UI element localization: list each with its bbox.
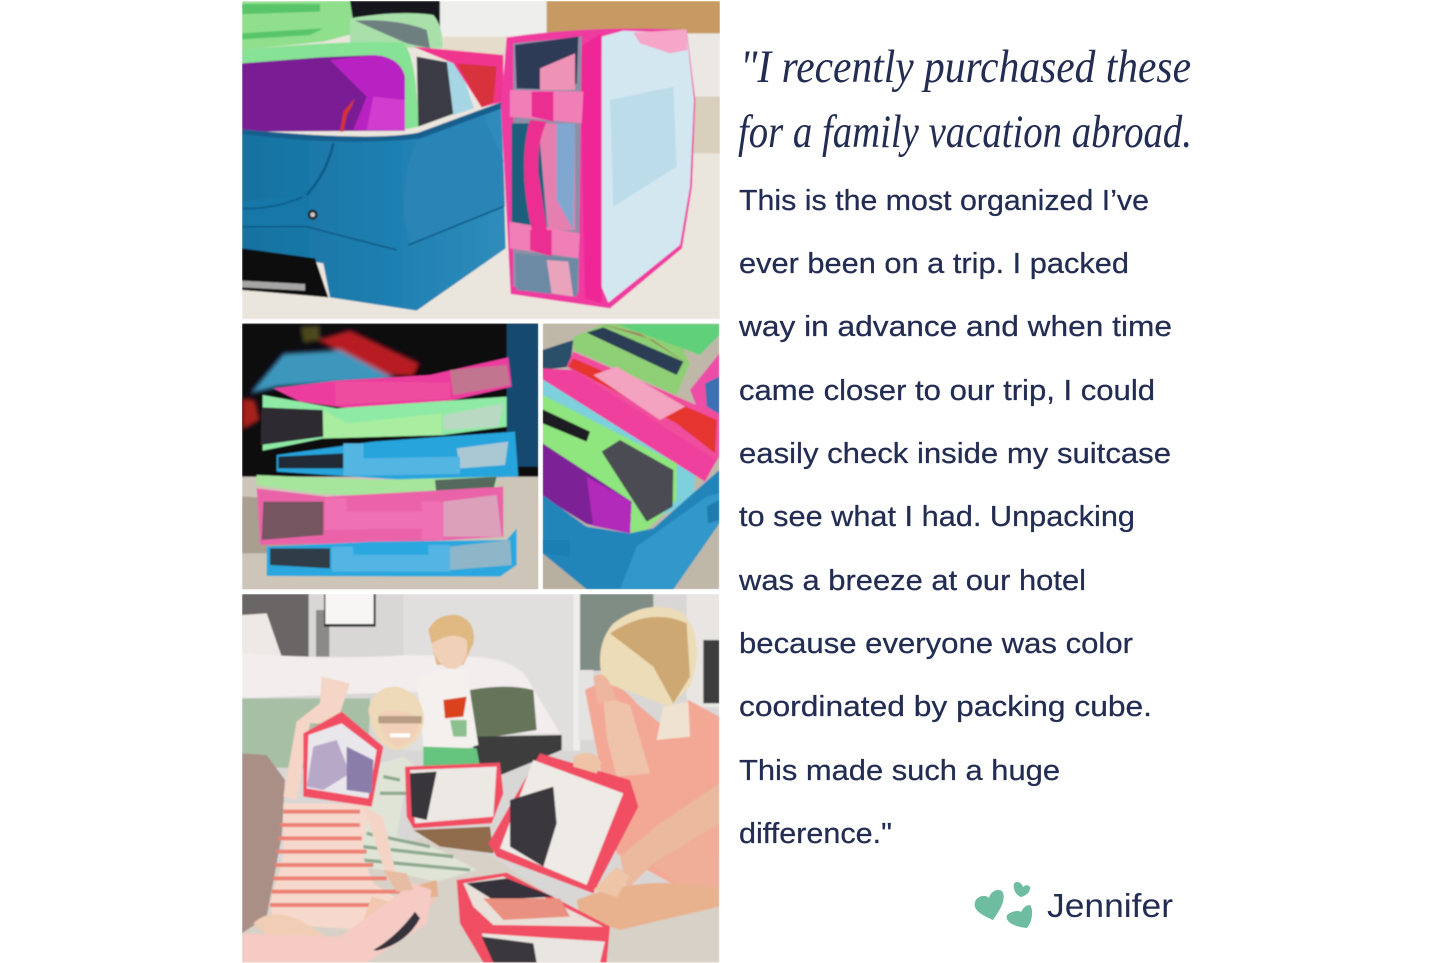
icon: three green hearts xyxy=(975,882,1032,928)
photo: family with packing cubes xyxy=(242,594,719,963)
testimonial body text: to see what I had. Unpacking xyxy=(739,501,1135,533)
photo: suitcase and pink packing cube xyxy=(242,1,720,319)
headline quote xyxy=(738,41,1192,158)
testimonial body text xyxy=(738,185,1172,850)
attribution name: Jennifer xyxy=(1047,887,1173,924)
testimonial body text: came closer to our trip, I could xyxy=(739,375,1155,407)
floor rug xyxy=(242,833,719,963)
testimonial body text: coordinated by packing cube. xyxy=(739,691,1152,723)
testimonial body text: This is the most organized I’ve xyxy=(739,185,1149,217)
testimonial body text: way in advance and when time xyxy=(738,311,1172,343)
testimonial body text: was a breeze at our hotel xyxy=(738,565,1086,597)
headline quote: for a family vacation abroad. xyxy=(738,106,1192,158)
headline quote: "I recently purchased these xyxy=(740,41,1191,93)
testimonial body text: because everyone was color xyxy=(739,628,1134,660)
testimonial body text: This made such a huge xyxy=(739,755,1060,787)
testimonial infographic xyxy=(242,1,1190,963)
testimonial body text: easily check inside my suitcase xyxy=(739,438,1171,470)
testimonial body text: difference." xyxy=(739,818,892,850)
photo: stack of packing cubes xyxy=(242,323,538,589)
photo: open suitcase with cubes xyxy=(543,323,719,589)
testimonial body text: ever been on a trip. I packed xyxy=(739,248,1129,280)
